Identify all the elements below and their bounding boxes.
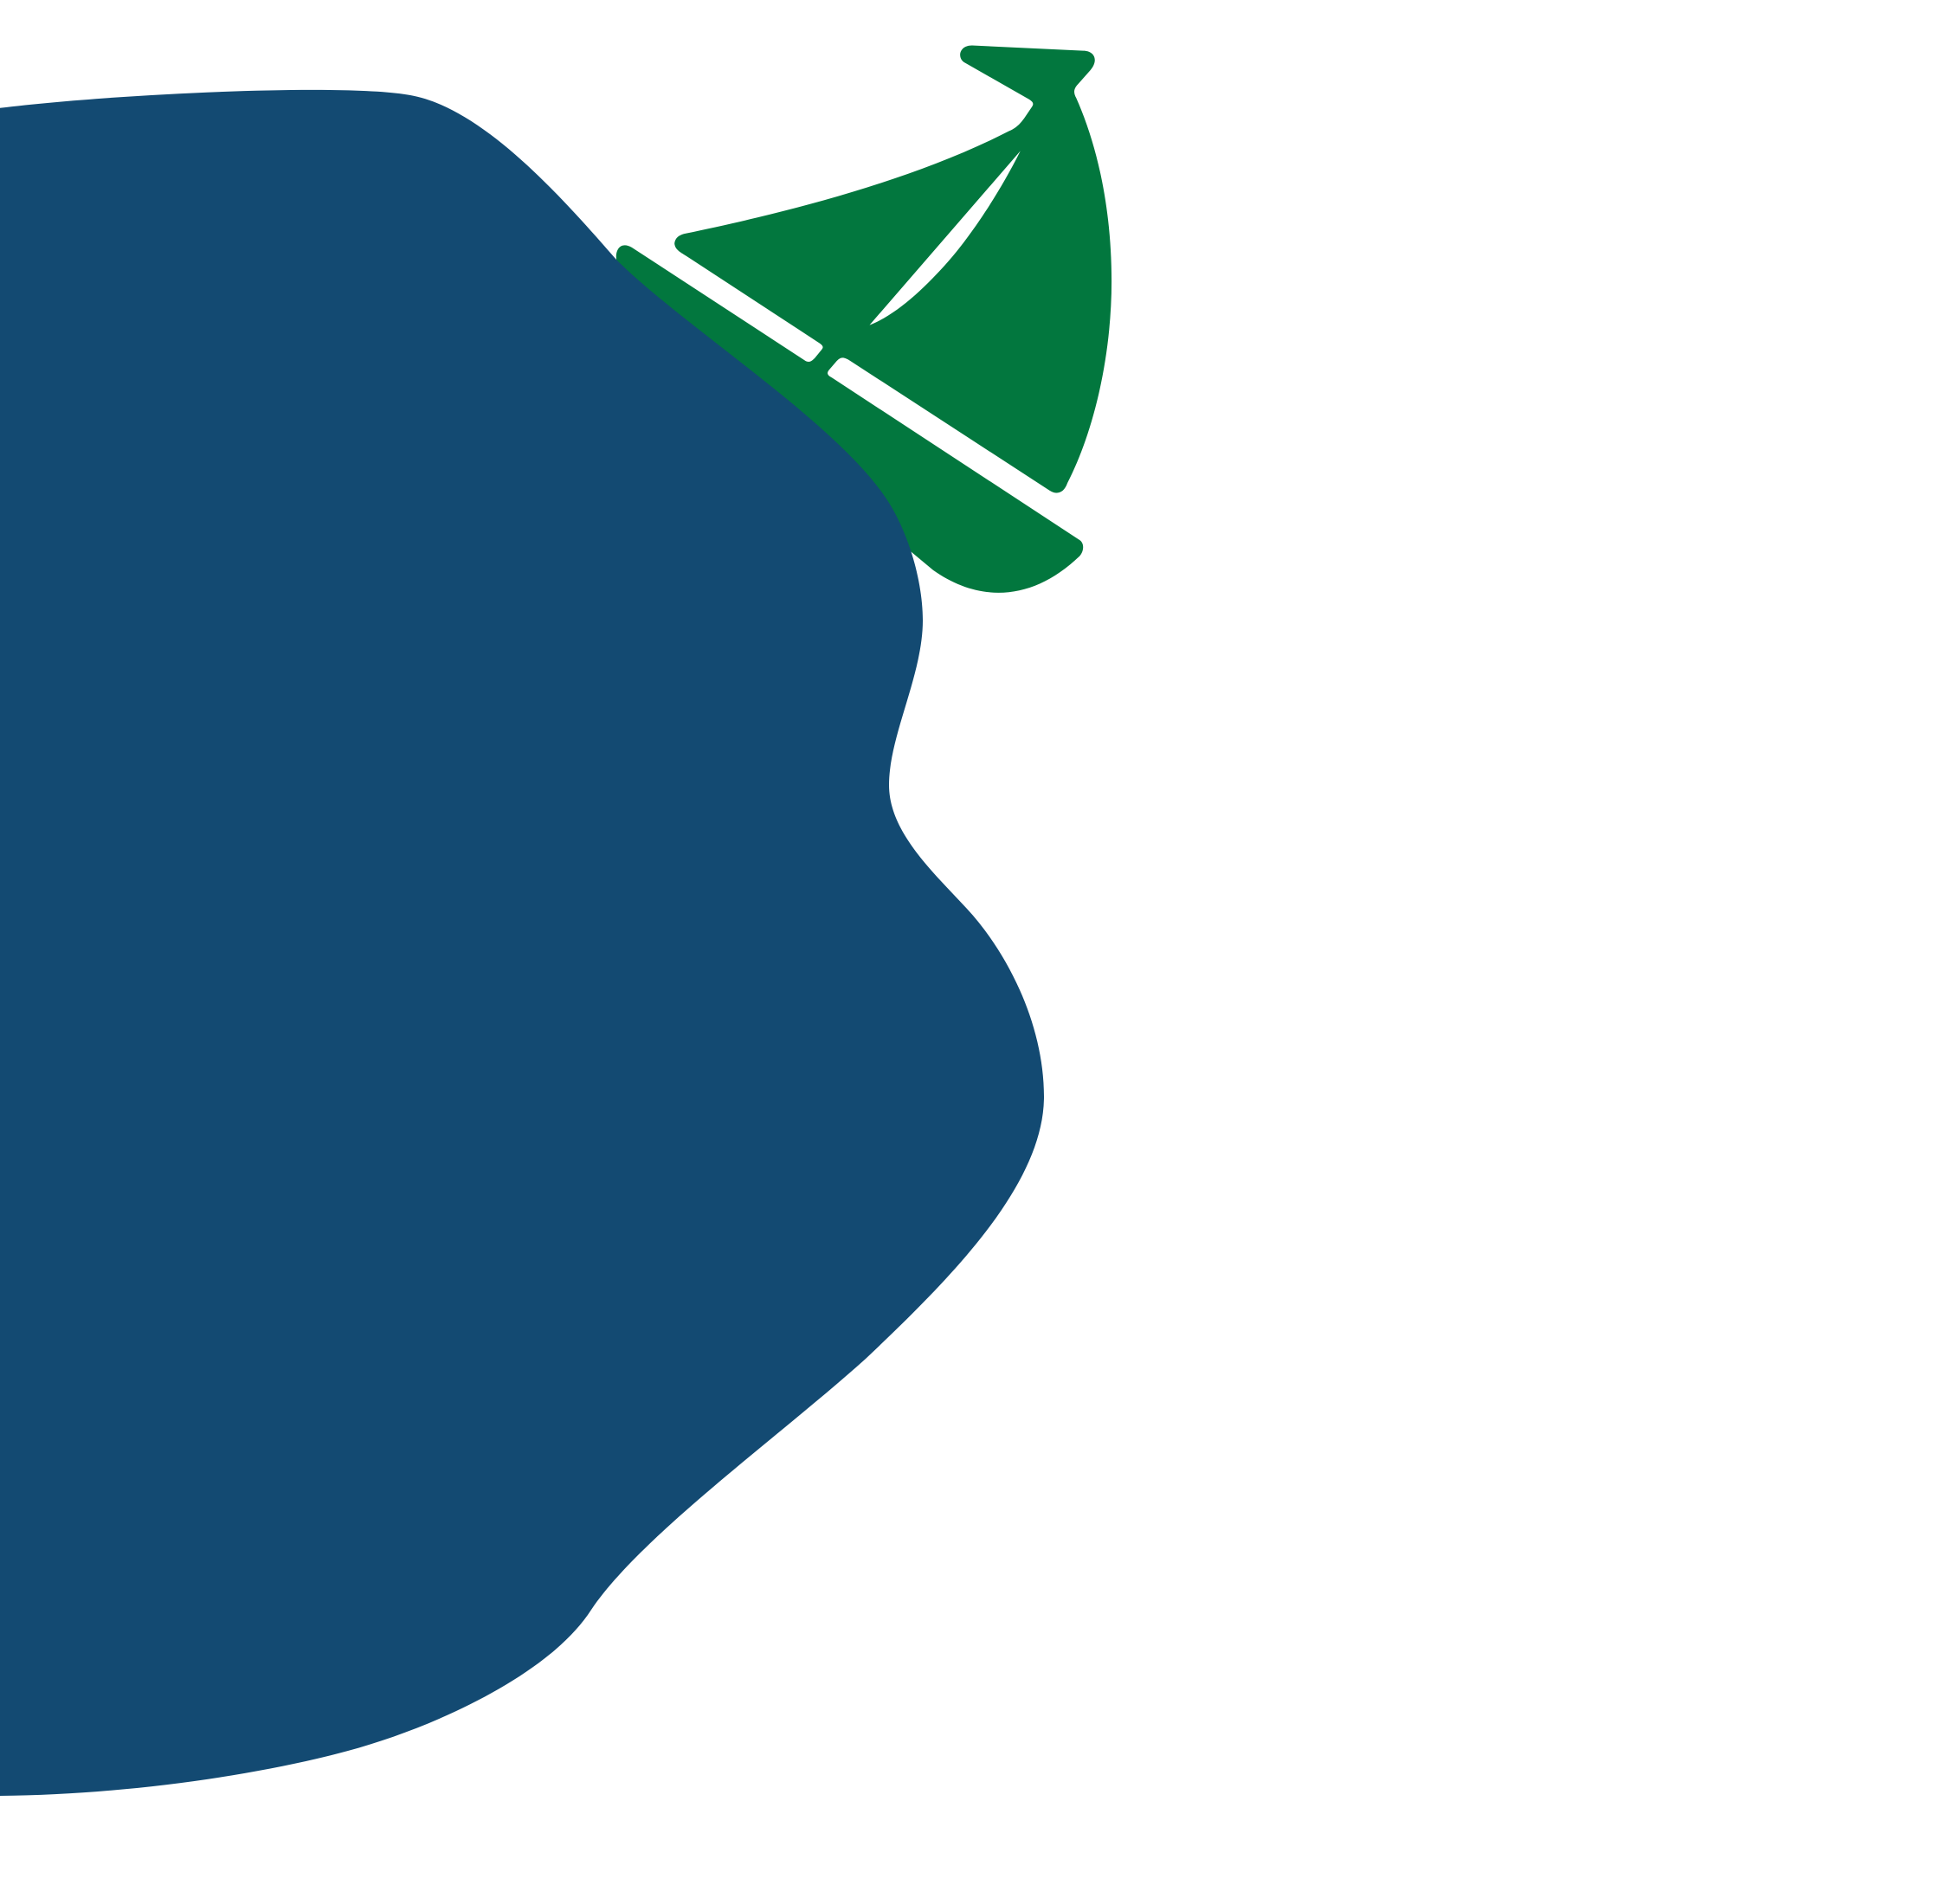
shape: blue landform xyxy=(0,90,1044,1796)
icon: green sailboat xyxy=(616,46,1111,593)
